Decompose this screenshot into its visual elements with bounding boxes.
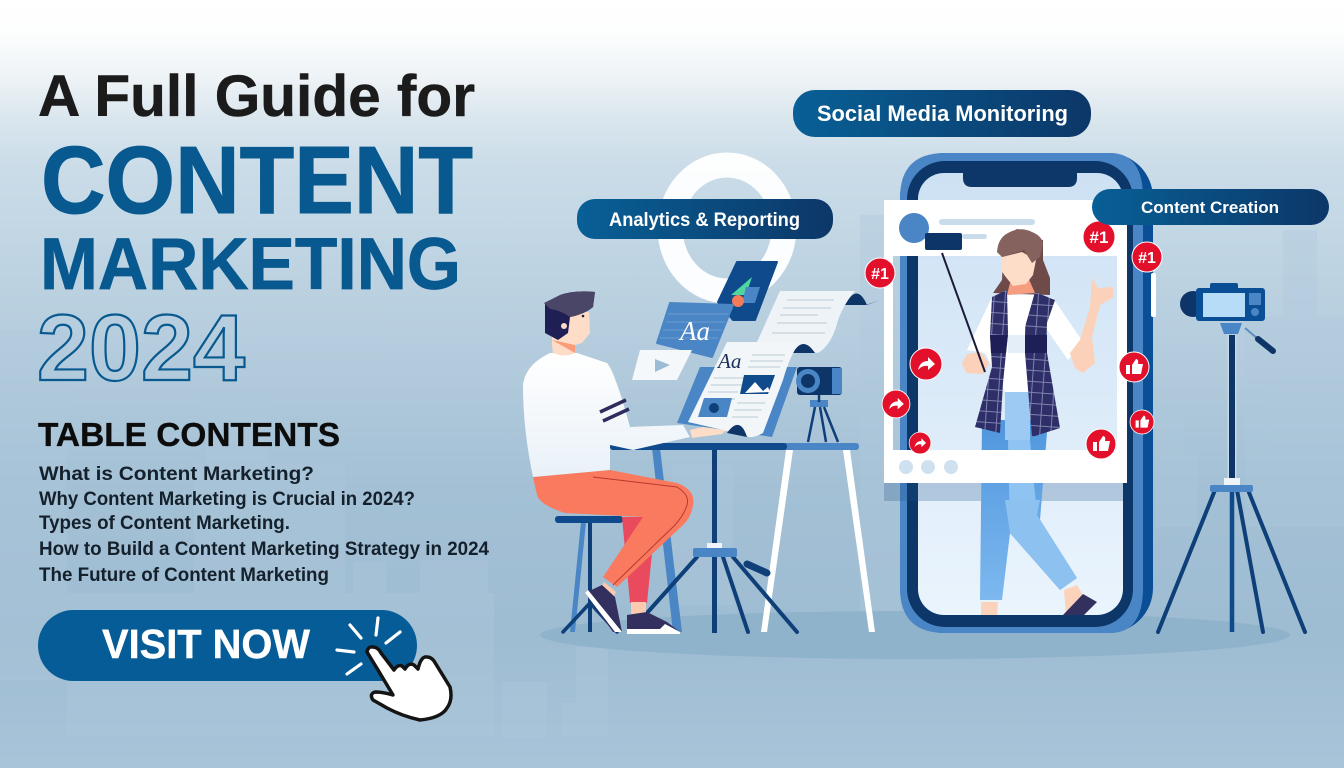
title: MARKETING: MARKETING [40, 224, 461, 305]
floating video card [632, 350, 692, 380]
post footer dots [899, 460, 958, 474]
man pants [533, 470, 693, 587]
icon: like small [1130, 410, 1154, 434]
badge: #1 right: #1 [1138, 250, 1156, 267]
pill: content creation: Content Creation [1141, 199, 1279, 217]
hair back [993, 229, 1050, 295]
table of contents list: The Future of Content Marketing [39, 565, 329, 586]
desk camera [796, 367, 842, 442]
table legs [647, 448, 875, 633]
post shadow [884, 483, 1123, 501]
man head [544, 291, 595, 356]
t-shirt [967, 295, 1083, 392]
ring light [670, 165, 784, 291]
vest shaded band [990, 335, 1047, 353]
pill: social media monitoring: Social Media Monitoring [817, 101, 1068, 126]
floating type card: Aa [678, 316, 710, 346]
table of contents list: How to Build a Content Marketing Strategy in 2024 [39, 539, 489, 560]
table top [610, 443, 859, 450]
man shirt [523, 353, 690, 477]
floor shadow ellipse [540, 611, 1290, 659]
icon: share small [909, 432, 931, 454]
selfie stick [942, 253, 985, 372]
front paper sheet: Aa [716, 349, 741, 373]
table of contents list: Types of Content Marketing. [39, 513, 290, 534]
pill: analytics and reporting: Analytics & Reporting [609, 210, 800, 231]
title: A Full Guide for: A Full Guide for [38, 64, 475, 129]
icon: like upper [1119, 352, 1149, 382]
floating chart card [718, 262, 777, 320]
badge: #1 left: #1 [871, 266, 889, 283]
selfie phone [925, 233, 962, 250]
vest right [1025, 292, 1060, 437]
man back leg [622, 517, 652, 603]
woman upper body [925, 229, 1114, 440]
background skyline [0, 215, 1344, 738]
title: 2024 outlined: 2024 [37, 295, 245, 400]
title: CONTENT: CONTENT [41, 127, 473, 234]
table of contents list [39, 464, 489, 586]
social post frame [884, 200, 1127, 483]
pill: social media monitoring [793, 90, 1091, 137]
pill: analytics and reporting [577, 199, 833, 239]
vest left [975, 290, 1008, 433]
badge: #1 right [1132, 242, 1162, 272]
face [1001, 252, 1036, 286]
neck [1007, 277, 1035, 295]
man hand [690, 426, 730, 438]
pill: content creation [1092, 189, 1329, 225]
hair front [997, 229, 1043, 263]
tripod camera [1158, 283, 1305, 632]
table of contents list: Why Content Marketing is Crucial in 2024? [39, 489, 415, 510]
front paper sheet [688, 342, 815, 437]
sleeve stripes [600, 400, 629, 421]
back paper sheet [757, 291, 880, 353]
jeans top [1005, 392, 1030, 440]
badge: #1 left [865, 258, 895, 288]
icon: share medium [882, 390, 910, 418]
floating type card [657, 303, 733, 357]
button: visit now: VISIT NOW [102, 621, 310, 667]
heading: table contents: TABLE CONTENTS [38, 417, 340, 454]
woman walking legs [980, 420, 1097, 615]
stool [555, 516, 623, 632]
badge: #1 top [1083, 221, 1115, 253]
phone [900, 153, 1156, 633]
button: visit now [38, 610, 417, 681]
desk scene [523, 262, 880, 634]
badge: #1 top: #1 [1090, 228, 1108, 247]
laptop [677, 367, 797, 437]
left hand [963, 353, 988, 373]
right arm and thumbs up [1070, 278, 1114, 373]
man skin ankle and shoes [585, 582, 680, 634]
icon: share large [910, 348, 942, 380]
icon: pointing hand cursor [367, 647, 451, 720]
icon: like lower [1086, 429, 1116, 459]
post header placeholder [899, 213, 1035, 243]
table of contents list: What is Content Marketing? [39, 464, 314, 485]
